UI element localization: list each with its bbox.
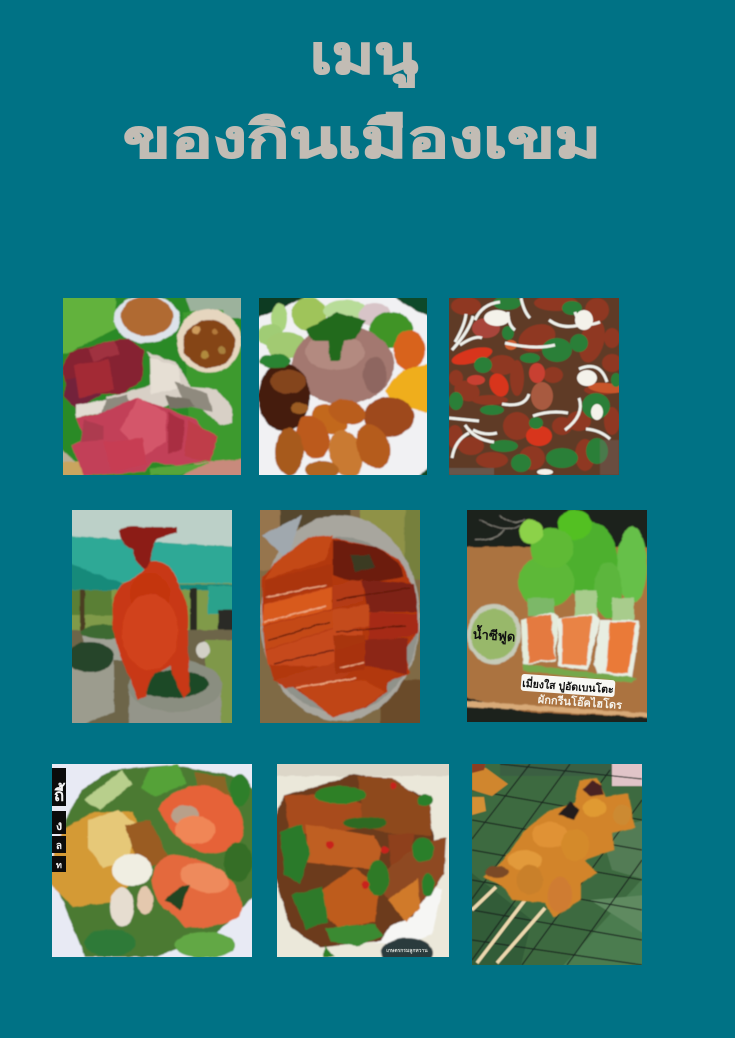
label: hydroponic green oak: ผักกรีนโอ๊คไฮโดร <box>537 692 623 712</box>
photo: crab stick spring rolls on wooden tray <box>467 510 647 722</box>
photo: crispy pork with basil over rice <box>277 764 449 957</box>
title <box>123 28 601 169</box>
label: shop badge text: เกษตรกรมลูกหวาน <box>386 948 428 955</box>
photo: whole roast duck hanging <box>72 510 232 723</box>
label: dish name badge: เมี่ยงใส ปูอัดเบนโตะ <box>522 675 614 697</box>
title: ของกินเมืองเขม <box>123 112 601 169</box>
left caption strip <box>52 768 66 872</box>
photo: raw meats and oysters on banana leaf with dips <box>63 298 241 475</box>
left caption strip: ถี้ <box>54 782 65 805</box>
title: เมนู <box>310 28 419 88</box>
left caption strip: ล <box>56 841 62 852</box>
left caption strip: ท <box>56 860 62 870</box>
photo: khao khluk kapi rice plate with sweet sausages <box>259 298 427 475</box>
label: seafood sauce: น้ำซีฟูด <box>472 624 516 645</box>
photo: spicy sausage salad <box>445 294 624 479</box>
photo: sliced roast duck on clear plate <box>260 510 420 723</box>
left caption strip: ง <box>56 818 62 833</box>
photo: grilled squid skewers on wire rack <box>468 760 646 969</box>
photo: stir-fried shrimp with egg <box>52 764 252 957</box>
